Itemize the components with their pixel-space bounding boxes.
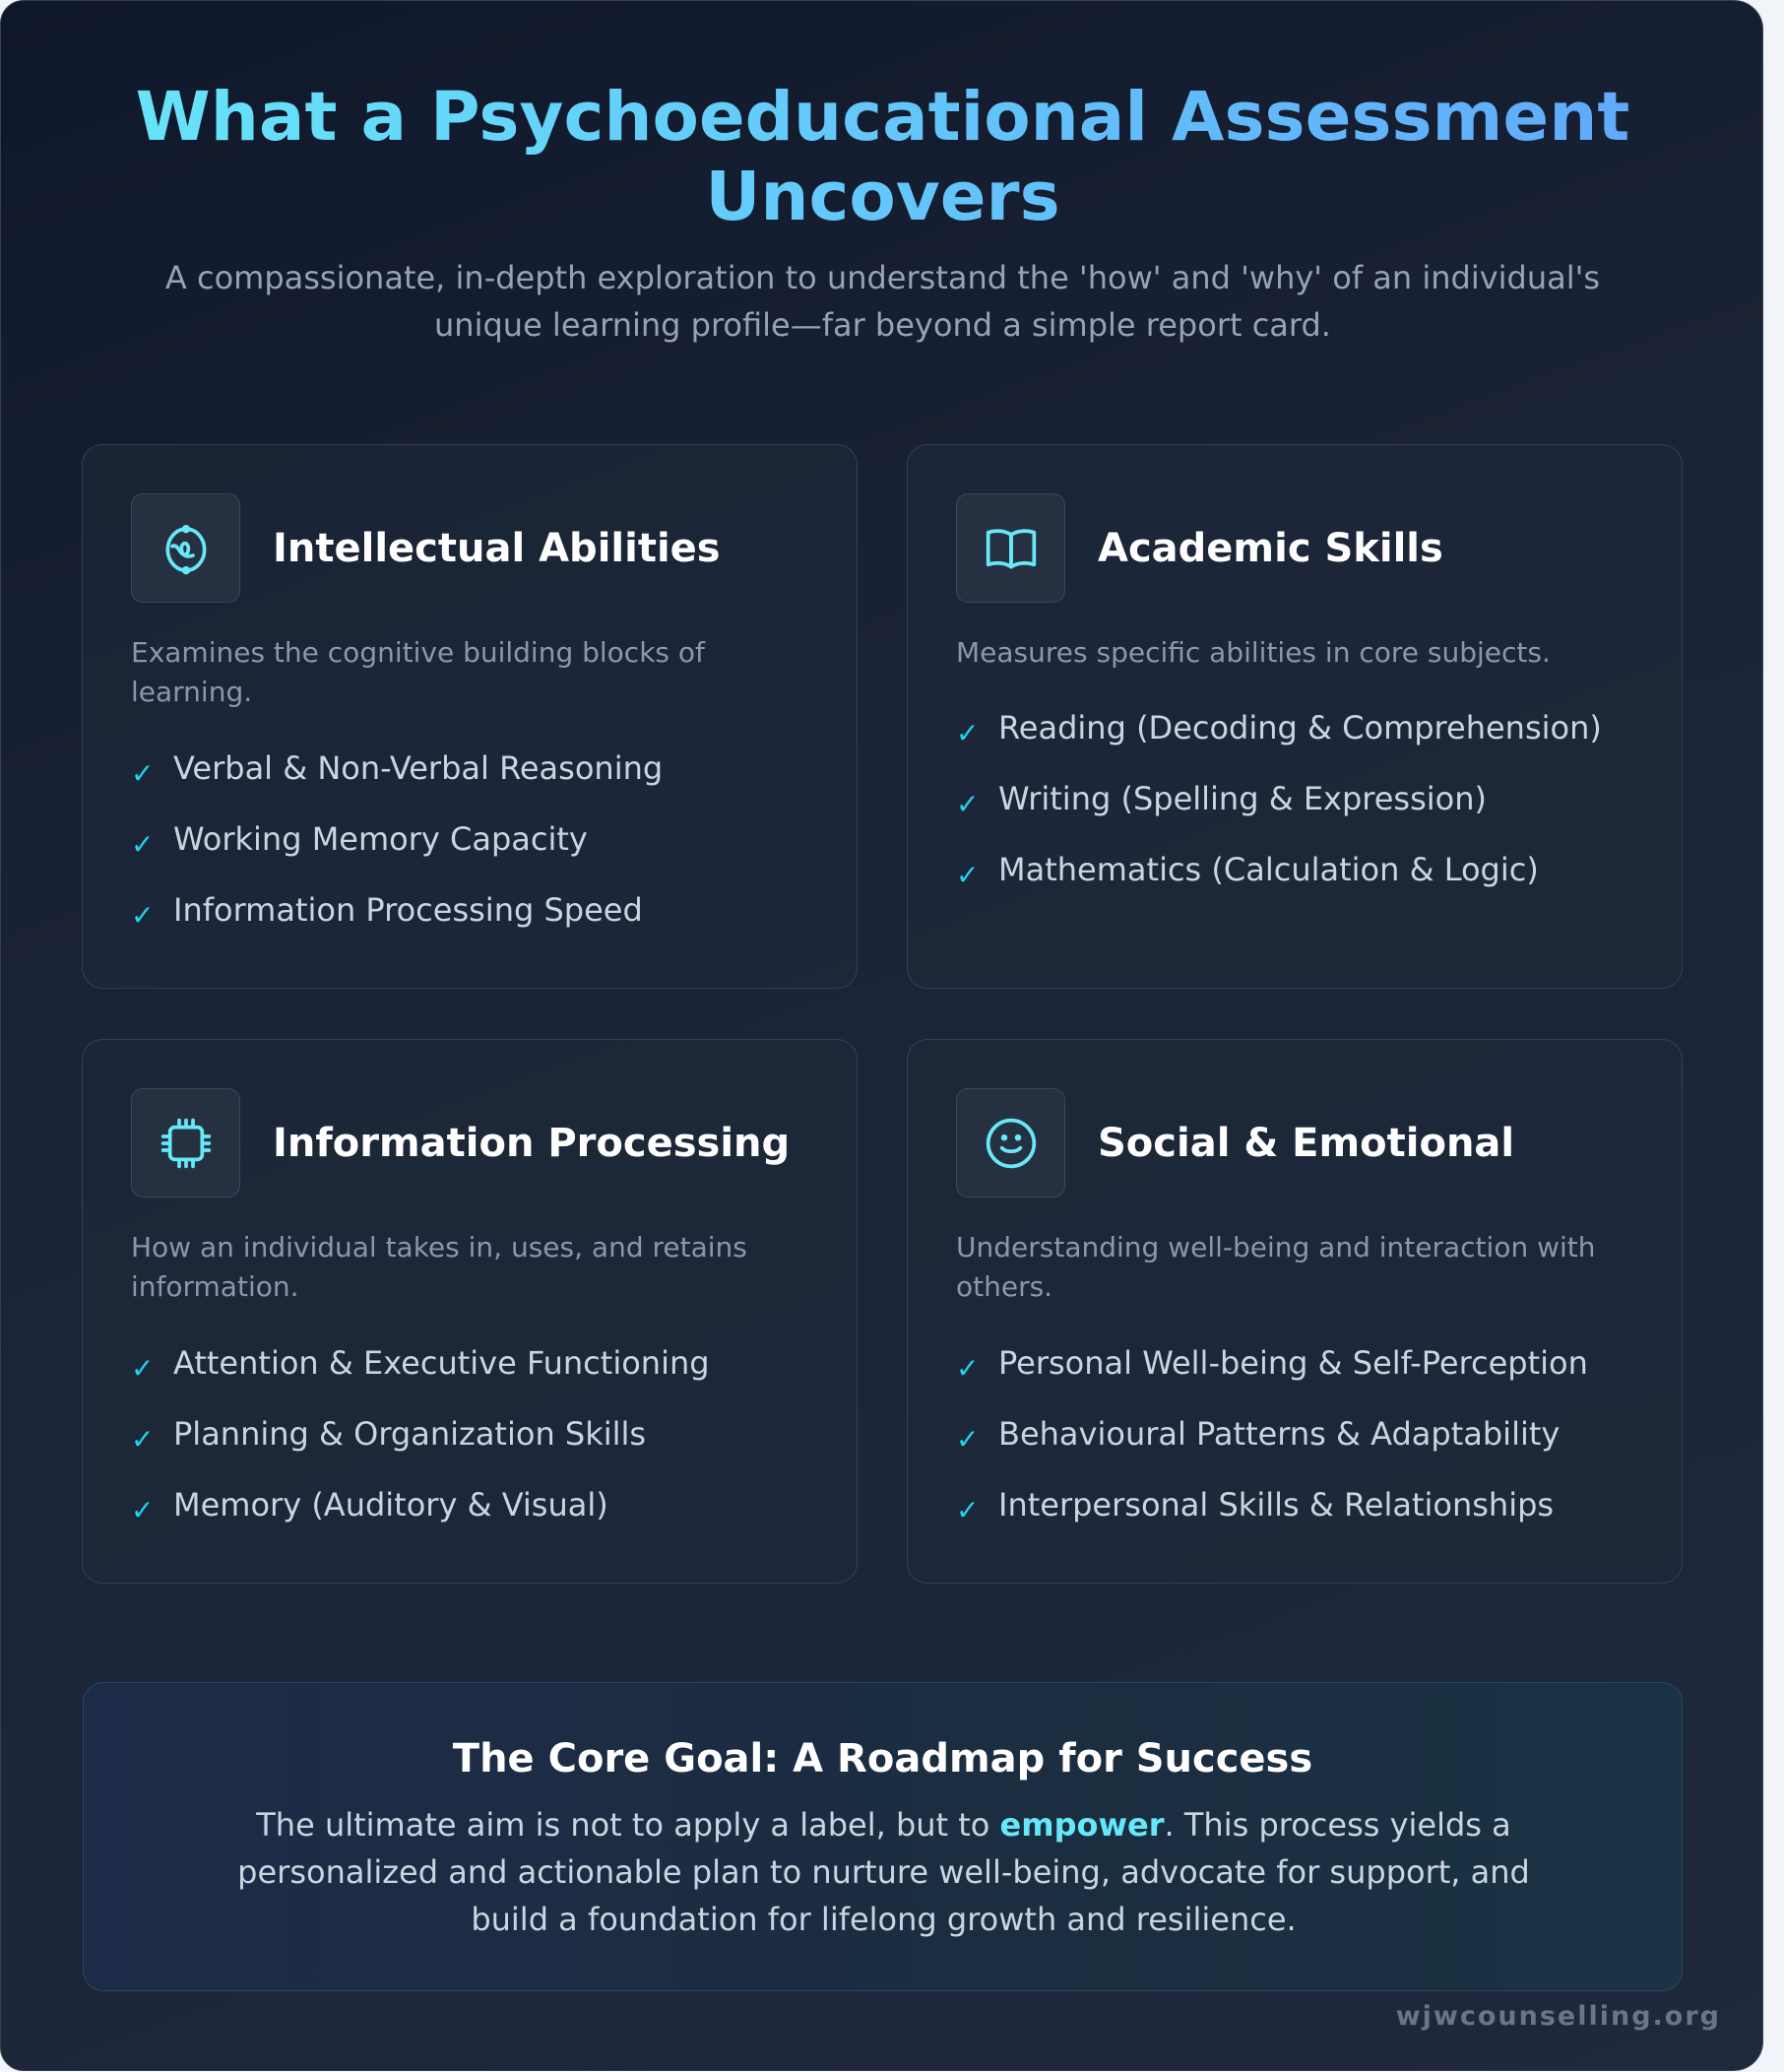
description: others. [956,1270,1052,1302]
checklist: Planning & Organization Skills [173,1415,646,1453]
icon: brain [131,493,240,603]
icon: smiley [956,1088,1065,1198]
description [131,636,705,707]
description: Measures specific abilities in core subjects. [956,636,1551,669]
checklist: ✓ [131,1352,154,1385]
description [956,1231,1595,1302]
checklist: Writing (Spelling & Expression) [998,780,1487,817]
checklist: Personal Well-being & Self-Perception [998,1344,1588,1382]
checklist: ✓ [956,1423,979,1456]
checklist [956,709,1602,891]
title: What a Psychoeducational Assessment [136,78,1629,157]
callout: core goal [83,1682,1683,1991]
subtitle [165,259,1600,344]
description: learning. [131,676,252,707]
checklist: ✓ [131,757,154,790]
subtitle: A compassionate, in-depth exploration to understand the 'how' and 'why' of an individual's [165,259,1600,296]
checklist: Information Processing Speed [173,891,643,929]
panel: intellectual abilities [82,444,858,989]
callout heading: The Core Goal: A Roadmap for Success [453,1736,1312,1781]
checklist: ✓ [956,1352,979,1385]
checklist: ✓ [131,1423,154,1456]
description [131,1231,747,1302]
title: Uncovers [705,158,1060,236]
checklist: ✓ [956,717,979,749]
footer: website: wjwcounselling.org [1396,2001,1721,2032]
checklist: ✓ [956,788,979,820]
checklist [956,1344,1588,1526]
checklist: Interpersonal Skills & Relationships [998,1486,1554,1523]
subtitle: unique learning profile—far beyond a simple report card. [434,306,1331,344]
panel: academic skills [907,444,1683,989]
checklist: Memory (Auditory & Visual) [173,1486,608,1523]
description: Examines the cognitive building blocks of [131,636,705,669]
heading: Intellectual Abilities [273,526,721,571]
checklist: ✓ [956,859,979,891]
description: information. [131,1270,299,1302]
callout body: The ultimate aim is not to apply a label, but to empower. This process yields a personalized and actionable plan to nurture well-being, advocate for support, and build a foundation for lifelong growth and resilience. [237,1806,1530,1938]
checklist [131,749,663,932]
heading: Information Processing [273,1121,790,1166]
checklist: Working Memory Capacity [173,820,588,858]
title [1,78,1764,237]
icon: chip [131,1088,240,1198]
heading: Academic Skills [1098,526,1443,571]
checklist: ✓ [956,1494,979,1526]
description: How an individual takes in, uses, and retains [131,1231,747,1263]
checklist: Behavioural Patterns & Adaptability [998,1415,1560,1453]
checklist [131,1344,710,1526]
checklist: Reading (Decoding & Comprehension) [998,709,1602,746]
panel: information processing [82,1039,858,1584]
checklist: ✓ [131,828,154,861]
panel: social and emotional [907,1039,1683,1584]
checklist: Mathematics (Calculation & Logic) [998,851,1539,888]
icon: book [956,493,1065,603]
checklist: Attention & Executive Functioning [173,1344,710,1382]
checklist: Verbal & Non-Verbal Reasoning [173,749,663,787]
checklist: ✓ [131,1494,154,1526]
checklist: ✓ [131,899,154,932]
description: Understanding well-being and interaction with [956,1231,1595,1263]
heading: Social & Emotional [1098,1121,1514,1166]
